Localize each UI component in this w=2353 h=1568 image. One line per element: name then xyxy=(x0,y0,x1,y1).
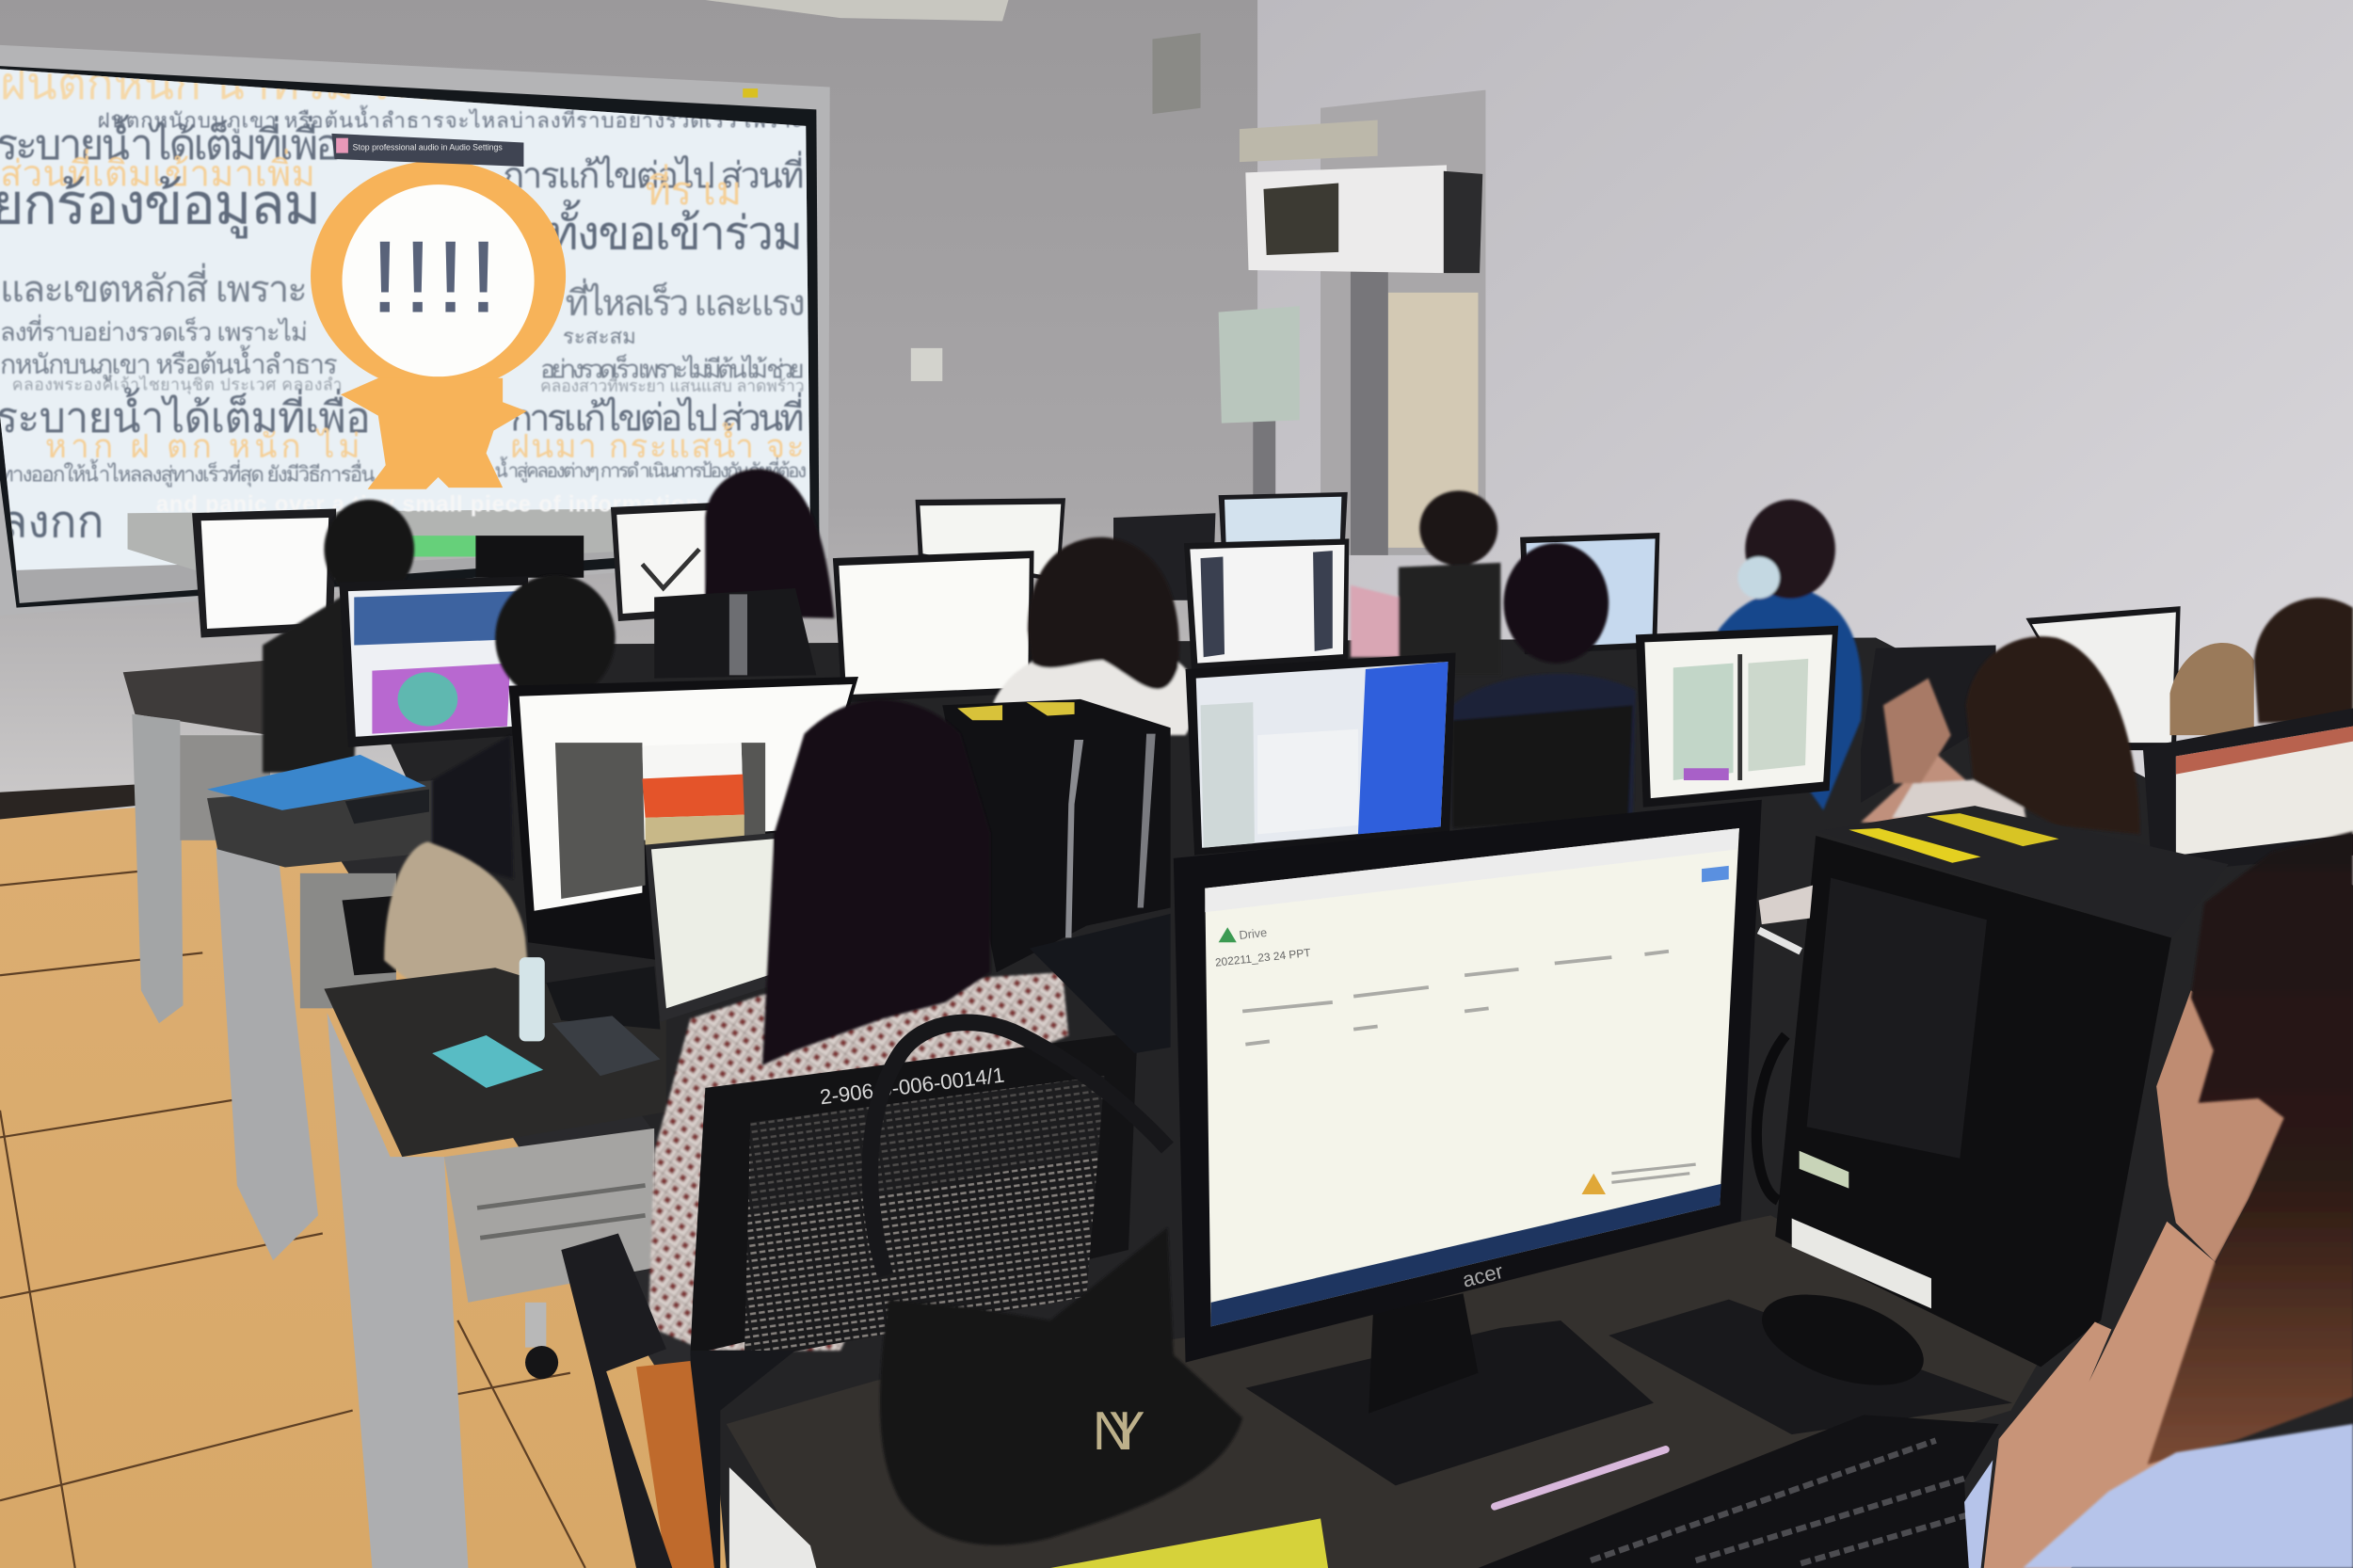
person far right back xyxy=(2254,598,2353,723)
tower behind monitor xyxy=(1113,513,1215,600)
back left table xyxy=(123,660,270,1023)
big black tower foreground xyxy=(1775,806,2229,1367)
projected Thai text: ระบายน้ำได้เต็มที่เพื่อ xyxy=(0,387,371,441)
second row table xyxy=(207,755,510,867)
projected Thai text: หาก ฝ ตก หนัก ไม่ xyxy=(45,427,360,465)
back row monitor left xyxy=(192,508,336,638)
monitor with infographic slide xyxy=(1636,626,1838,808)
orange chair seat xyxy=(636,1361,714,1568)
smartphone xyxy=(552,1016,661,1076)
floor xyxy=(0,780,780,1568)
computer mouse xyxy=(1751,1277,1935,1403)
side cables and white rail xyxy=(1756,886,1813,1200)
projected Thai text: กหนักบนภูเขา หรือต้นน้ำลำธาร xyxy=(0,345,338,381)
dark chair behind handbag xyxy=(343,896,396,975)
black laptop folder xyxy=(1030,914,1171,1053)
man in blue shirt xyxy=(1719,500,1862,810)
front row table xyxy=(324,968,666,1568)
light blue shirt xyxy=(2023,1424,2353,1568)
meeting caption bar xyxy=(331,134,523,167)
monitor far right lower xyxy=(2143,708,2353,873)
mousepad xyxy=(1609,1300,2012,1434)
projected Thai text: การแก้ไขต่อไป ส่วนที่ xyxy=(510,392,805,440)
left wall xyxy=(0,0,1260,840)
back monitor with chart xyxy=(611,503,714,621)
projected Thai text: ลงกก xyxy=(0,498,104,548)
file folder title: 202211_23 24 PPT xyxy=(1214,946,1312,969)
wall speaker xyxy=(1152,33,1201,114)
person dark hair centre right xyxy=(1452,543,1636,828)
projected Thai text: การแก้ไขต่อไป ส่วนที่ xyxy=(503,150,805,196)
projected Thai text: น้ำสู่คลองต่างๆ การดำเนินการป้องกันภัยที่ต้อง xyxy=(494,456,807,483)
dark room backdrop behind furniture xyxy=(345,638,2353,1568)
monitor right back blue xyxy=(1520,533,1659,654)
tower back centre left xyxy=(475,536,584,578)
keyboard front xyxy=(1478,1415,1999,1568)
person back left xyxy=(263,500,414,773)
yellow folder xyxy=(1050,1518,1328,1568)
meeting caption bar: Stop professional audio in Audio Settings xyxy=(353,142,503,152)
second row table leg and cabinet xyxy=(216,848,396,1260)
black shoulder bag: NY xyxy=(1093,1401,1145,1462)
paper tray stack xyxy=(1240,120,1378,162)
projected Thai text: ยกร้องข้อมูลม xyxy=(0,172,321,239)
projected Thai text: ส่วนที่เติมเข้ามาเพิ่ม xyxy=(0,149,315,195)
chair castor xyxy=(525,1303,558,1379)
projected Thai text: ที่ร เม xyxy=(646,164,742,213)
laptop xyxy=(646,833,780,1022)
person second row xyxy=(432,575,616,879)
projected Thai text: และเขตหลักสี่ เพราะ xyxy=(0,263,308,310)
white subtitle: and panic over a tiny small piece of information xyxy=(156,492,699,518)
shirt cuff xyxy=(1964,1460,1993,1568)
projected Thai text: คลองสาวทีพระยา แสนแสบ ลาดพร้าว xyxy=(540,376,805,395)
woman clapping right xyxy=(1861,636,2140,834)
sign in button xyxy=(1702,866,1729,882)
wicker basket xyxy=(2169,643,2254,735)
main monitor showing Drive xyxy=(1174,800,1762,1363)
tower middle xyxy=(654,588,816,679)
sticker labels xyxy=(1800,1151,1849,1189)
projected Thai text: ฝนมา กระแสน้ำ จะ xyxy=(510,422,805,465)
monitor far right xyxy=(2025,606,2181,750)
pink chair and person back right xyxy=(1351,490,1500,675)
front desk xyxy=(727,1215,2041,1568)
projected Thai text xyxy=(0,70,806,538)
projected Thai text: อย่างรวดเร็ว เพราะไม่มีต้นไม้ ช่วย xyxy=(540,353,805,384)
tower right back xyxy=(1861,646,1996,803)
projected Thai text: ทั้งขอเข้าร่วม xyxy=(548,200,803,260)
wall switch xyxy=(911,348,942,381)
woman centre with long hair xyxy=(648,699,1068,1351)
projected Thai text: ระบายน้ำได้เต็มที่เพื่อ xyxy=(0,114,341,168)
back monitor blue xyxy=(1219,492,1348,549)
orange warning mascot xyxy=(311,161,566,489)
chair label: 2-906-0-006-0014/1 xyxy=(819,1063,1006,1109)
long hair xyxy=(2148,831,2353,1464)
projected Thai text: ฝนตกหนัก น้ำท่วม ระบาย คลองต่างๆ น้ำไหลบ่าลงที่ราบอย่างรวดเร็ว xyxy=(0,51,1319,109)
chair armrest xyxy=(561,1233,672,1568)
black tower centre xyxy=(942,699,1171,972)
projected Thai text: ระสะสม xyxy=(563,325,636,348)
quilted beige handbag xyxy=(384,841,533,1038)
hand and forearm xyxy=(1984,1222,2251,1568)
projected Thai text: ที่ไหลเร็ว และแรง xyxy=(566,278,806,324)
electrical box xyxy=(1219,306,1300,424)
file rows xyxy=(1242,952,1669,1045)
recessed doorway and pillar xyxy=(1253,90,1485,555)
sanitizer bottle xyxy=(520,957,545,1041)
right wall xyxy=(1257,0,2353,930)
toolbar green button xyxy=(411,536,477,556)
orange warning mascot: !!!! xyxy=(371,220,502,334)
main monitor stand xyxy=(1245,1293,1654,1485)
Drive logo and label: Drive xyxy=(1239,925,1268,942)
projected Thai text: ฝนตกหนักบนภูเขา หรือต้นน้ำลำธารจะไหลบ่าลงที่ราบอย่างรวดเร็ว เพราะ xyxy=(98,105,803,134)
screen brand tag xyxy=(743,88,758,98)
projected Thai text: ลงที่ราบอย่างรวดเร็ว เพราะไม่ xyxy=(0,314,308,346)
back monitor centre xyxy=(916,498,1065,583)
monitor with windows desktop xyxy=(1186,653,1456,856)
face xyxy=(2156,990,2288,1262)
brand text: acer xyxy=(1460,1259,1506,1292)
person with long hair at back xyxy=(705,469,834,618)
Drive promo logo xyxy=(1581,1174,1606,1194)
projected Thai text: คลองพระองค์เจ้าไชยานุชิต ประเวศ คลองลำ xyxy=(12,376,343,395)
monitor with web page xyxy=(339,576,528,747)
large monitor with orange slide xyxy=(508,677,858,960)
woman foreground right xyxy=(1964,831,2353,1568)
monitor centre white xyxy=(833,551,1034,702)
zoom toolbar xyxy=(128,507,810,570)
keyboard second row xyxy=(546,967,661,1030)
pink pen xyxy=(1495,1449,1666,1507)
wall cabinet xyxy=(1245,165,1482,273)
monitor with dark side bars xyxy=(1184,538,1349,669)
projector screen xyxy=(0,45,830,608)
mesh office chair xyxy=(690,1032,1138,1568)
black shoulder bag xyxy=(870,1022,1242,1545)
projected Thai text: ทางออกให้น้ำไหลลงสู่ทางเร็วที่สุด ยังมีวิธีการอื่น xyxy=(0,459,376,488)
ceiling air conditioner xyxy=(705,0,1008,21)
person centre white shirt xyxy=(993,537,1204,735)
teal power bank xyxy=(432,1035,543,1088)
white desk drawer xyxy=(729,1467,816,1568)
